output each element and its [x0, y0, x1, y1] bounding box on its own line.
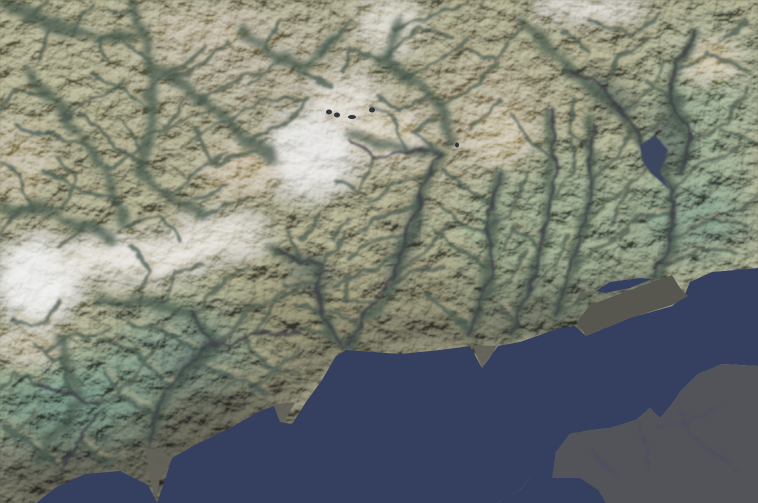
northern barrier flat	[577, 275, 688, 336]
lagoon	[596, 278, 652, 293]
highland tarns	[326, 108, 459, 148]
peninsula drainage	[590, 405, 740, 480]
southern peninsula	[552, 364, 758, 503]
northern lake inlet	[640, 135, 670, 190]
shadowed gorges	[162, 64, 686, 393]
dark shoreline band	[20, 290, 660, 503]
sea	[36, 268, 758, 503]
southern sea pocket	[496, 478, 606, 503]
coastal mud flats and spits	[146, 345, 497, 500]
main drainage channels	[40, 30, 695, 470]
